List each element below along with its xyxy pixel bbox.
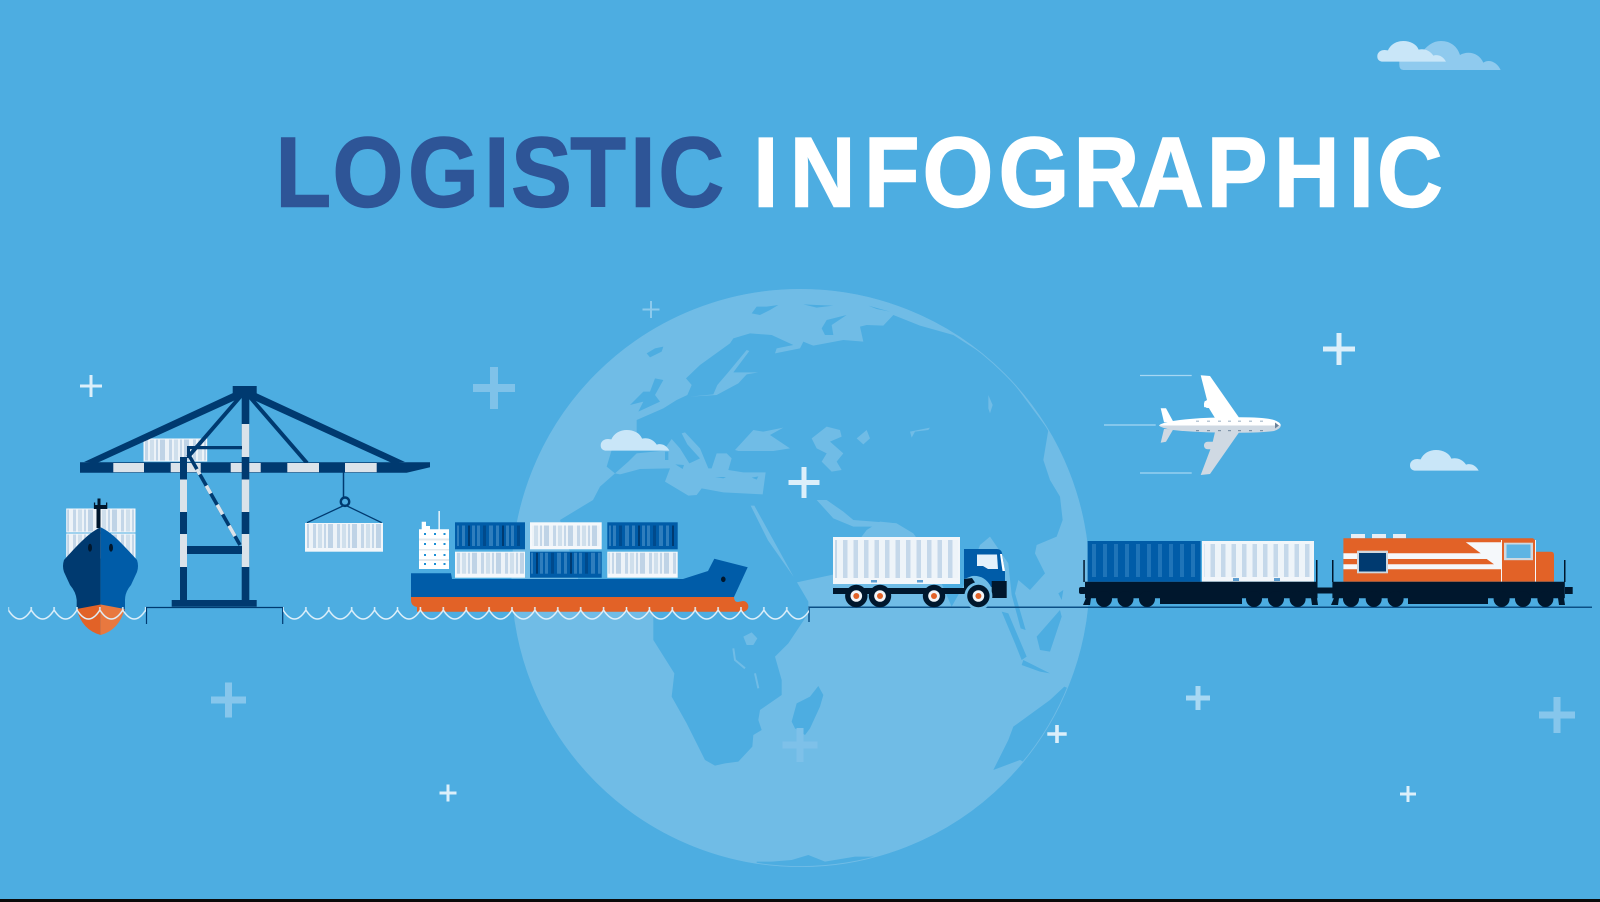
truck container <box>833 537 960 584</box>
plus <box>440 784 456 802</box>
sea: Baltic <box>690 350 758 397</box>
decorative plus signs <box>80 301 1575 802</box>
truck <box>833 537 1007 610</box>
plus small over globe edge <box>642 301 660 318</box>
bow right <box>101 604 125 635</box>
hanging container <box>305 523 383 552</box>
island: Iceland <box>647 347 663 357</box>
sea: Black Sea <box>735 428 790 451</box>
anchor eye <box>721 576 726 582</box>
boom <box>80 462 430 473</box>
island: Novaya Zemlya <box>822 315 847 335</box>
containers top row <box>455 522 678 549</box>
ground lines <box>146 607 1592 624</box>
superstructure <box>419 511 449 569</box>
hull left <box>63 527 101 612</box>
uprights <box>1332 560 1334 582</box>
plus on globe bottom <box>782 728 818 762</box>
white container <box>1202 541 1314 582</box>
plus far right <box>1539 697 1575 733</box>
cloud back <box>1399 41 1501 70</box>
top wing <box>1201 375 1239 418</box>
quay <box>146 608 283 624</box>
couplers <box>1079 587 1086 594</box>
plus right of plane <box>1323 333 1355 365</box>
braces <box>187 446 242 458</box>
cab <box>964 549 1005 587</box>
cloud right <box>1410 450 1479 471</box>
top engine <box>1204 401 1216 408</box>
title word: LOGISTIC: LOGISTIC <box>276 118 724 228</box>
island: Crete <box>715 477 726 478</box>
clouds top right <box>1377 41 1501 70</box>
wheels <box>845 585 990 607</box>
bow left <box>77 604 101 635</box>
roof vents <box>1351 534 1406 538</box>
island: Madagascar <box>792 686 823 735</box>
island: Java <box>1022 660 1050 673</box>
windows <box>1196 420 1263 422</box>
hull right <box>101 527 138 612</box>
hull <box>411 559 748 597</box>
tail bottom <box>1161 429 1173 443</box>
plus over globe <box>788 467 820 498</box>
fuselage <box>1159 417 1281 426</box>
plus lower left <box>211 682 246 718</box>
ropes <box>307 505 382 523</box>
blue container <box>1088 541 1201 582</box>
coupler <box>1565 587 1573 594</box>
lake: Baikal <box>988 395 993 413</box>
base <box>172 600 257 607</box>
portholes <box>88 544 92 552</box>
island: Sicily <box>675 464 684 469</box>
containers bottom row <box>455 552 678 578</box>
mirror <box>1000 554 1005 571</box>
mast <box>94 498 107 528</box>
plus <box>1400 786 1416 802</box>
island: Sardinia and Corsica <box>665 452 668 460</box>
island: Cyprus <box>752 476 758 480</box>
lake: Balkhash <box>910 428 930 438</box>
nose <box>1536 552 1554 582</box>
airplane <box>1104 375 1281 475</box>
loco frame <box>1332 582 1565 604</box>
island: Franz Josef <box>803 304 833 308</box>
wagon frame <box>1085 582 1318 604</box>
top container <box>144 439 207 461</box>
orange waterline <box>411 597 748 612</box>
cloud over globe <box>601 430 669 451</box>
cab window <box>1504 543 1533 560</box>
land: Antarctica <box>756 855 874 866</box>
sea: Aral <box>857 430 870 444</box>
island: Britain and Ireland <box>630 378 663 412</box>
land: Eurasia and Africa <box>560 315 1063 766</box>
body <box>1343 538 1535 582</box>
legs <box>1083 598 1318 605</box>
waves <box>8 606 809 622</box>
plus <box>1186 686 1210 710</box>
island: Philippines <box>1058 590 1063 600</box>
island: Borneo <box>1037 610 1062 652</box>
uprights <box>1083 560 1085 582</box>
apex <box>233 386 257 396</box>
speed lines <box>1104 376 1192 473</box>
cab underside <box>964 578 980 590</box>
sea: Mediterranean <box>615 432 766 496</box>
bottom edge bar <box>0 899 1600 902</box>
legs <box>242 396 249 600</box>
diagonal strut <box>190 457 240 545</box>
bumper <box>992 581 1007 598</box>
sea: Persian Gulf <box>817 500 879 527</box>
cloud front <box>1377 41 1446 62</box>
sea: Caspian <box>812 427 843 472</box>
island: Arctic north <box>870 306 889 312</box>
title word: INFOGRAPHIC: INFOGRAPHIC <box>753 118 1443 228</box>
road and rail line <box>809 607 1592 622</box>
front-view ship <box>63 498 138 635</box>
island: Sumatra <box>1002 612 1027 660</box>
lake strips <box>733 648 758 688</box>
freight wagon <box>1079 541 1332 607</box>
port crane <box>80 386 430 607</box>
hook cable <box>342 472 344 498</box>
stays <box>84 393 405 463</box>
globe limb line <box>512 289 1089 867</box>
plus large <box>473 367 515 409</box>
window <box>977 554 998 569</box>
bottom engine <box>1204 442 1217 449</box>
title <box>276 118 1443 228</box>
cockpit <box>1275 422 1279 428</box>
tail top <box>1161 408 1173 422</box>
containers behind front ship <box>67 509 135 558</box>
plus globe right <box>1047 725 1067 743</box>
chassis <box>833 588 973 594</box>
land: Australia <box>994 686 1067 770</box>
legs <box>1331 598 1565 605</box>
side window <box>1357 551 1388 573</box>
locomotive <box>1331 534 1573 607</box>
globe <box>512 289 1100 885</box>
hook <box>341 498 349 506</box>
white stripes <box>1343 542 1502 569</box>
cargo ship <box>411 511 748 612</box>
door lines <box>1501 540 1536 582</box>
island: Svalbard <box>752 305 778 315</box>
lake: Victoria <box>743 632 757 645</box>
wheels <box>1343 591 1553 607</box>
wheel arch <box>964 582 992 610</box>
plus <box>80 375 102 397</box>
wheels <box>1096 591 1306 607</box>
bottom wing <box>1201 432 1239 475</box>
